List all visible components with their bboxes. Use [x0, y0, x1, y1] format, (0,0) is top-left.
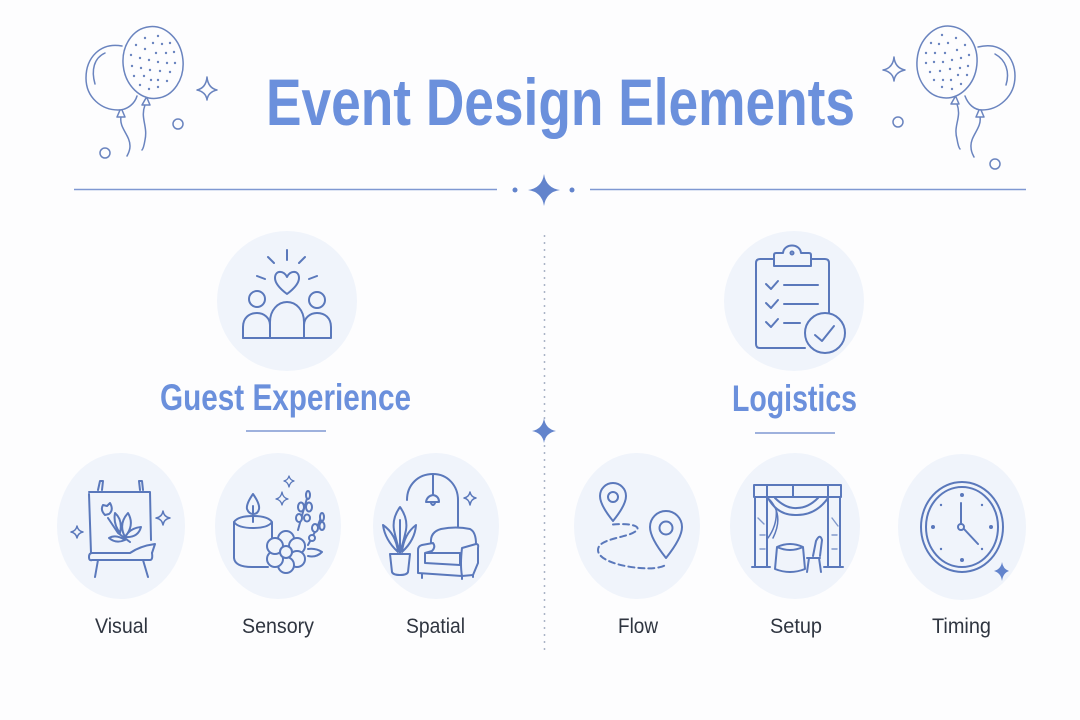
heading: guest experience: Guest Experience	[160, 377, 411, 418]
icon: easel	[71, 481, 170, 577]
icon: candle and flower	[234, 476, 324, 573]
icon: stage with drapes	[752, 485, 843, 572]
label: flow: Flow	[618, 615, 659, 638]
icon: balloons left	[86, 24, 217, 158]
icon: route pins	[598, 483, 682, 568]
item: sensory	[215, 453, 341, 638]
icon: guests with heart	[217, 231, 357, 371]
label: sensory: Sensory	[242, 615, 314, 638]
heading: logistics: Logistics	[732, 378, 857, 419]
panel: guest experience	[57, 231, 499, 638]
item: spatial	[373, 453, 499, 638]
header divider	[74, 174, 1026, 206]
title: Event Design Elements	[266, 65, 855, 139]
label: timing: Timing	[932, 615, 991, 638]
item: visual	[57, 453, 185, 638]
label: spatial: Spatial	[406, 615, 465, 638]
panel: logistics	[574, 231, 1026, 638]
item: flow	[574, 453, 700, 638]
icon: armchair lamp and plant	[383, 474, 478, 579]
centre dotted divider	[532, 235, 556, 650]
label: visual: Visual	[95, 615, 148, 638]
item: setup	[730, 453, 860, 638]
label: setup: Setup	[770, 615, 822, 638]
icon: clipboard with check	[724, 231, 864, 371]
item: timing	[898, 454, 1026, 638]
icon: sparkle	[994, 562, 1009, 581]
icon: wall clock	[921, 482, 1003, 572]
icon: balloons right	[883, 23, 1015, 169]
